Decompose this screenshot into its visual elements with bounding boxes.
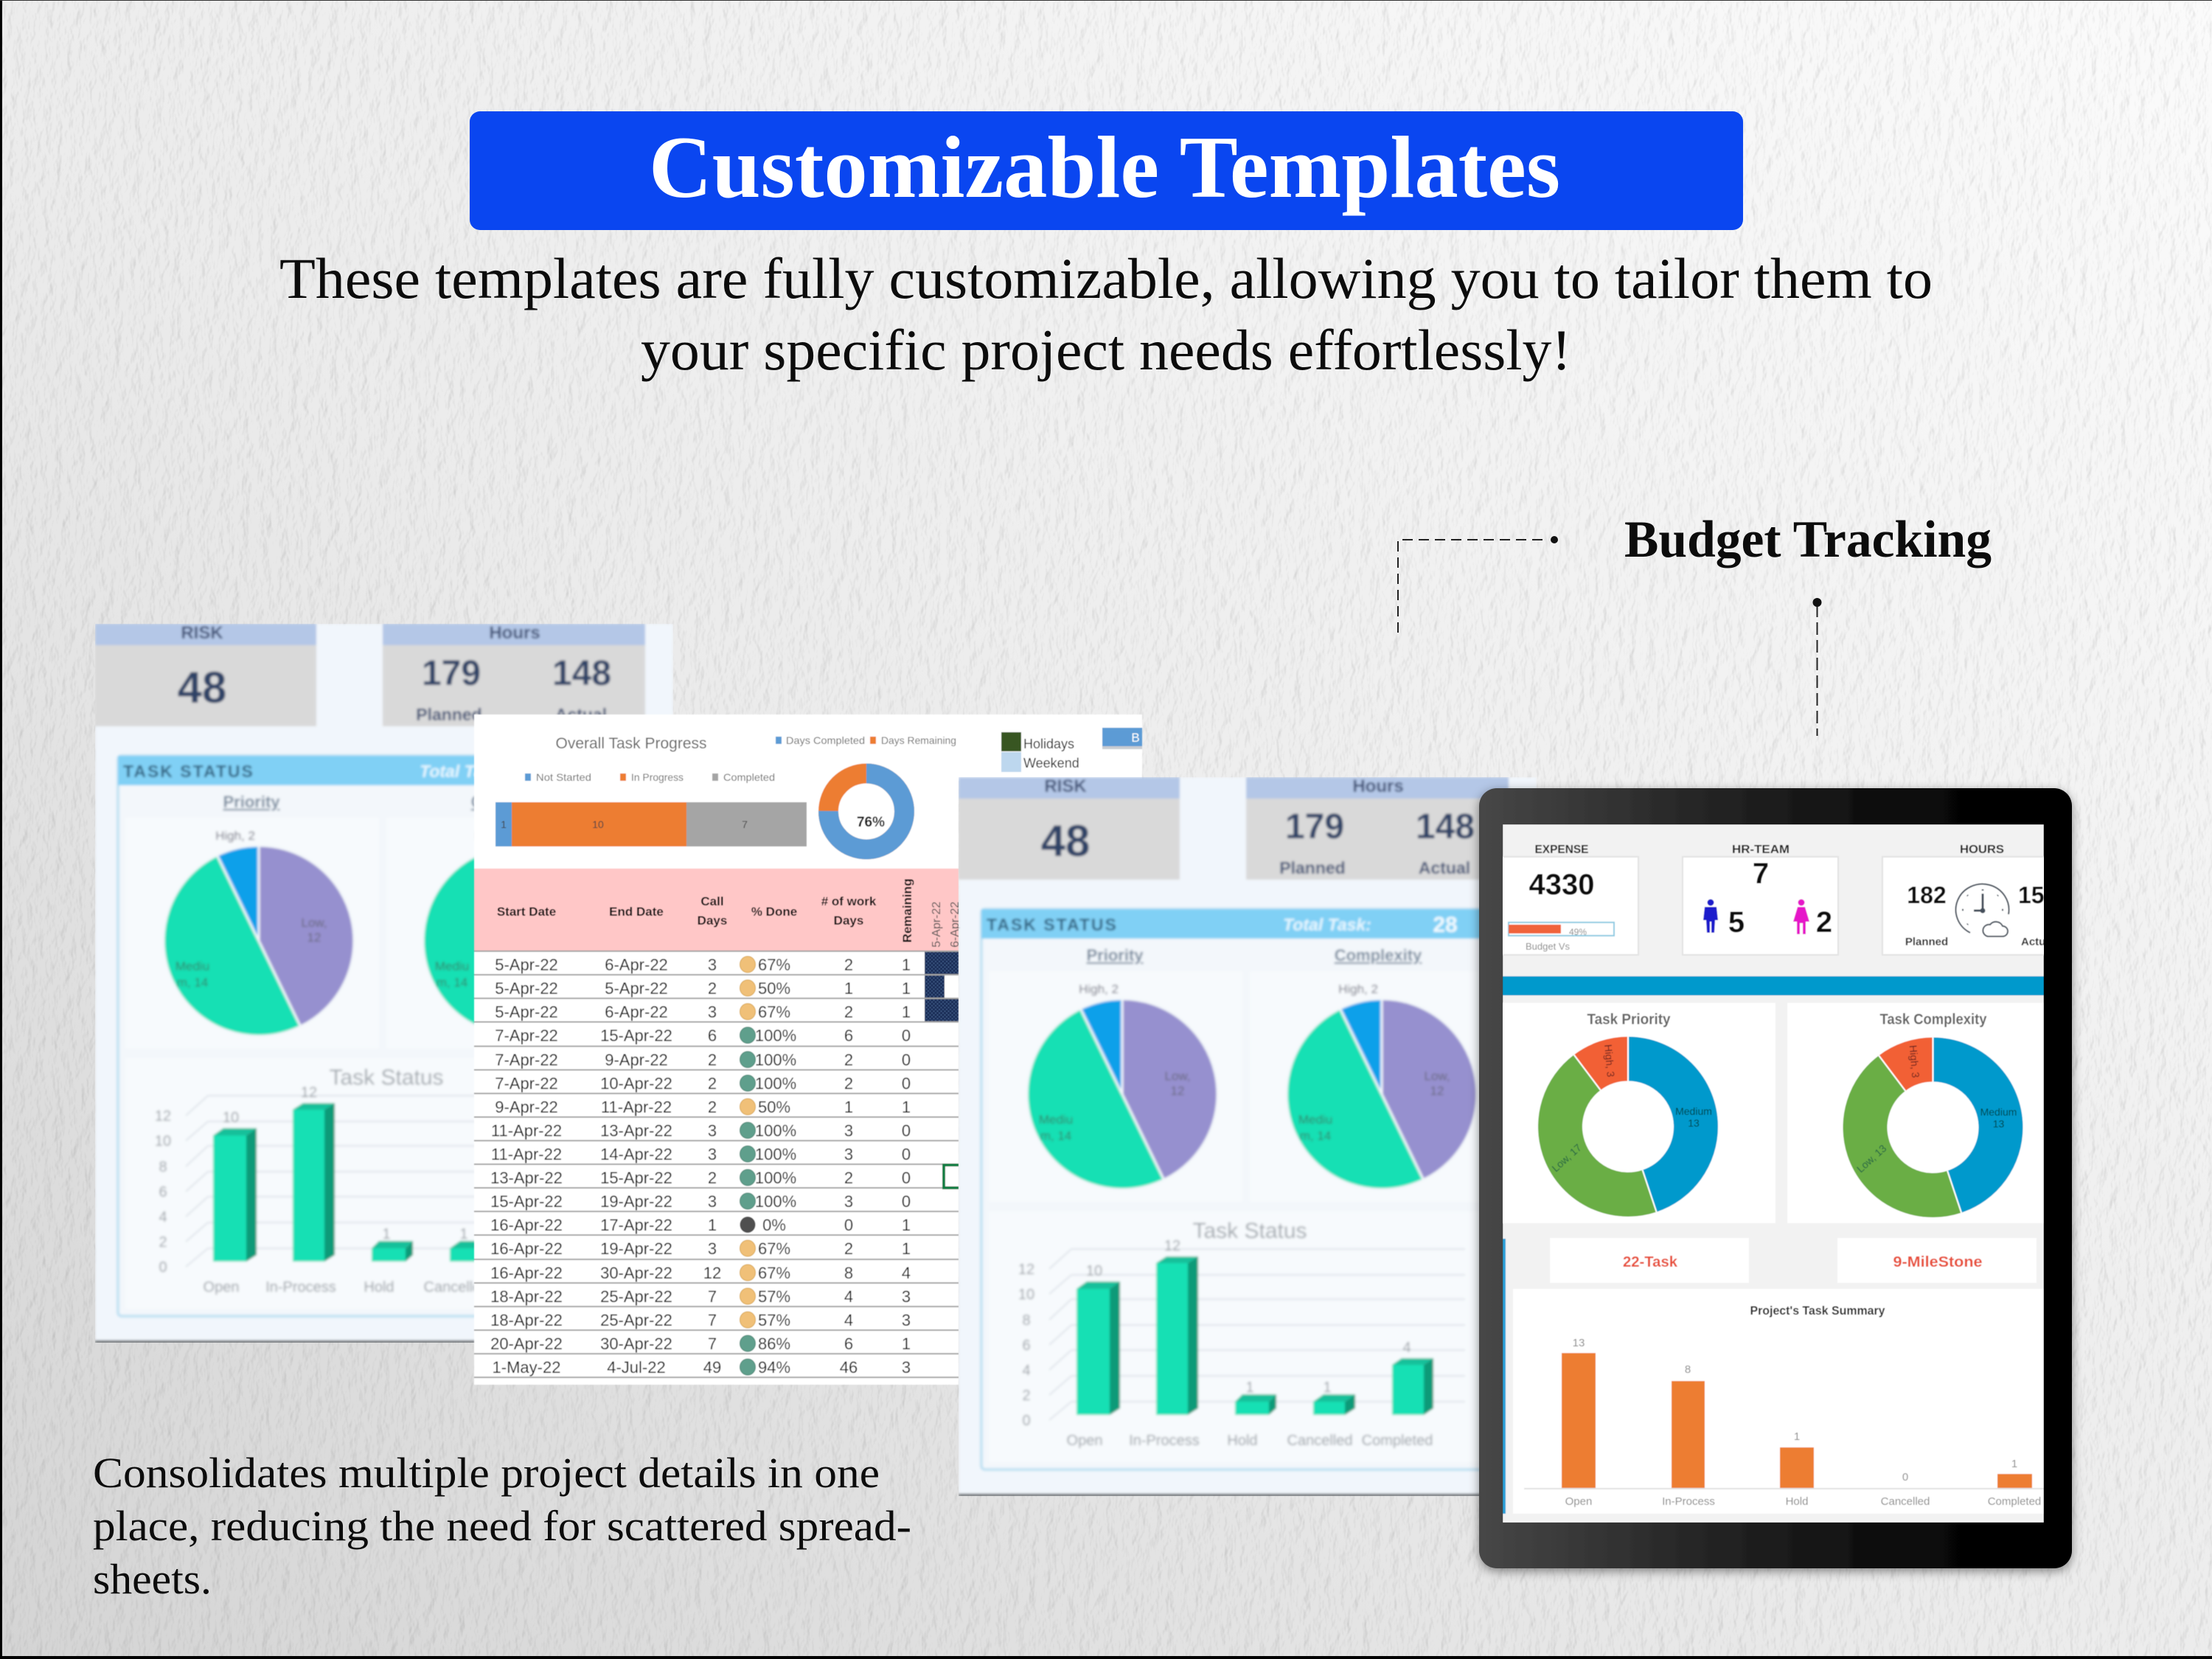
table rows: 0	[902, 1192, 911, 1211]
bar chart: project's task summary: 0	[1902, 1471, 1908, 1484]
table rows: 94%	[758, 1358, 790, 1377]
table rows: 2	[844, 1169, 853, 1187]
chart card: task complexity: Low, 13	[1854, 1142, 1889, 1175]
hr-team card	[1683, 844, 1838, 955]
table rows: 100%	[755, 1074, 796, 1093]
table rows: 5-Apr-22	[605, 979, 668, 998]
bar chart: task status: 0	[159, 1259, 167, 1276]
table rows: 2	[844, 1051, 853, 1069]
table rows: 2	[844, 956, 853, 974]
expense card	[1497, 844, 1638, 955]
bar chart: task status: Hold	[1227, 1433, 1258, 1449]
table rows: 67%	[758, 1264, 790, 1282]
chart card: task priority: Low, 17	[1549, 1141, 1584, 1174]
chart title: Overall Task Progress	[555, 735, 707, 752]
gantt cells	[925, 952, 959, 1021]
table rows: 25-Apr-22	[600, 1287, 672, 1306]
pie chart: priority: Low,	[302, 916, 327, 930]
bar chart: task status: 4	[1022, 1363, 1031, 1379]
table rows: 16-Apr-22	[490, 1239, 563, 1258]
bar chart: task status: 1	[1245, 1380, 1254, 1396]
hours card: Actual	[555, 705, 607, 724]
bar chart: task status: Completed	[498, 1279, 569, 1295]
panel: back dashboard left	[95, 623, 673, 1343]
table rows: 1	[902, 956, 911, 974]
table rows: 4-Jul-22	[607, 1358, 666, 1377]
bar chart: task status: 0	[1022, 1413, 1031, 1429]
text block: consolidates project details: place, reducing the need for scattered spread-	[93, 1502, 911, 1550]
pie chart: complexity	[1287, 982, 1477, 1189]
table rows: 67%	[758, 1003, 790, 1021]
expense card: EXPENSE	[1535, 844, 1589, 856]
table rows: 11-Apr-22	[601, 1098, 672, 1116]
table rows: 2	[844, 1074, 853, 1093]
task status bar: Total Task:	[420, 762, 508, 781]
pie chart: priority	[1027, 982, 1217, 1189]
table rows: 3	[708, 956, 717, 974]
hours card: HOURS	[1960, 844, 2004, 856]
table rows: 9-Apr-22	[495, 1098, 558, 1116]
task status bar: TASK STATUS	[123, 762, 254, 781]
expense card: 49%	[1569, 927, 1587, 937]
button	[1102, 728, 1142, 749]
bar chart: project's task summary: In-Process	[1662, 1495, 1715, 1508]
table rows: 12	[703, 1264, 721, 1282]
hours card: 182	[1907, 882, 1947, 908]
hours card: 148	[1416, 807, 1475, 846]
bar chart: project's task summary: Project's Task Summary	[1750, 1304, 1885, 1318]
table rows: 7-Apr-22	[495, 1051, 558, 1069]
bar chart: project's task summary: Cancelled	[1881, 1495, 1930, 1508]
expense card: Budget Vs	[1526, 941, 1570, 952]
table rows: 5-Apr-22	[495, 956, 558, 974]
hours card	[383, 623, 645, 726]
chart card: task priority	[1497, 1003, 1775, 1223]
table rows: 18-Apr-22	[490, 1311, 563, 1329]
bar chart: task status: 12	[1164, 1238, 1180, 1254]
bar chart: task status: Hold	[364, 1279, 394, 1295]
table rows: 3	[844, 1145, 853, 1164]
text block: consolidates project details	[93, 1449, 911, 1603]
hours card: Actual	[2021, 936, 2055, 948]
hours card: Planned	[1905, 936, 1948, 948]
chart card: task priority: High, 3	[1602, 1044, 1617, 1078]
table rows: 0	[844, 1216, 853, 1234]
table rows: 2	[708, 1051, 717, 1069]
button: B	[1131, 731, 1140, 745]
risk card: RISK	[181, 623, 223, 643]
panel: back dashboard right	[959, 776, 1537, 1496]
stacked bar	[495, 802, 807, 846]
legend: holidays and weekend: Weekend	[1023, 756, 1079, 771]
hours card: 15	[2018, 882, 2045, 908]
table rows: 3	[708, 1145, 717, 1164]
bar chart: task status: Open	[1067, 1433, 1102, 1449]
pie chart: complexity: Low,	[561, 916, 586, 930]
table header: % Done	[751, 905, 797, 919]
task status bar: TASK STATUS	[987, 915, 1118, 934]
table rows: 7	[708, 1335, 717, 1353]
table rows: 0%	[762, 1216, 786, 1234]
stacked bar: 7	[742, 818, 748, 830]
table header: End Date	[609, 905, 664, 919]
hr-team card: HR-TEAM	[1732, 844, 1790, 856]
blue band	[1503, 976, 2044, 995]
chart card: task complexity: 13	[1993, 1118, 2004, 1130]
table rows: 6-Apr-22	[605, 956, 668, 974]
pie chart: priority: Low,	[1165, 1069, 1190, 1083]
table header: Remaining	[900, 879, 914, 942]
subtitle text: your specific project needs effortlessly!	[641, 318, 1571, 382]
bar chart: project's task summary: 1	[2011, 1458, 2017, 1470]
table rows: 3	[902, 1287, 911, 1306]
bar chart: task status: Cancelled	[1287, 1433, 1352, 1449]
legend: days: Days Remaining	[881, 734, 956, 746]
table rows: 6	[844, 1335, 853, 1353]
donut chart: 76%: 76%	[857, 815, 885, 830]
bar chart: task status: 12	[155, 1108, 171, 1124]
table rows: 17-Apr-22	[600, 1216, 672, 1234]
hours card: 148	[552, 654, 611, 693]
bar chart: task status: In-Process	[1129, 1433, 1200, 1449]
hours card	[1246, 776, 1509, 880]
table rows: 1	[708, 1216, 717, 1234]
hours card	[1882, 844, 2055, 955]
panel: back dashboard left: Complexity	[471, 793, 559, 811]
pie chart: priority: Mediu	[175, 959, 209, 973]
tablet mockup	[1479, 788, 2072, 1568]
stacked bar: 1	[501, 818, 507, 830]
table rows: 1	[902, 1239, 911, 1258]
bar chart: task status: 2	[159, 1234, 167, 1251]
pie chart: complexity	[422, 856, 475, 1026]
bar chart: task status: In-Process	[265, 1279, 336, 1295]
table rows: 1	[844, 979, 853, 998]
stat card: 22-task	[1550, 1238, 1749, 1283]
table header: 6-Apr-22	[949, 902, 961, 947]
panel: back dashboard left: Priority	[223, 793, 280, 811]
legend: status: Not Started	[536, 771, 591, 783]
bar chart: task status: 10	[1018, 1287, 1034, 1303]
table rows: 30-Apr-22	[600, 1335, 672, 1353]
table rows: 16-Apr-22	[490, 1216, 563, 1234]
pie chart: priority: Mediu	[1039, 1113, 1073, 1127]
table rows: 7	[708, 1287, 717, 1306]
table rows: 50%	[758, 979, 790, 998]
table rows: 57%	[758, 1311, 790, 1329]
bar chart: task status: 12	[1018, 1262, 1034, 1278]
pie chart: priority: m, 14	[1040, 1129, 1071, 1143]
table rows: 57%	[758, 1287, 790, 1306]
pie chart: complexity: High, 2	[475, 829, 515, 843]
task status bar: 28	[569, 759, 594, 784]
table rows: 15-Apr-22	[600, 1169, 672, 1187]
table rows: 25-Apr-22	[600, 1311, 672, 1329]
table header: Call	[700, 894, 724, 908]
table rows: 2	[708, 979, 717, 998]
table rows: 86%	[758, 1335, 790, 1353]
table rows: 1	[902, 1003, 911, 1021]
bar chart: project's task summary: Hold	[1786, 1495, 1808, 1508]
table rows: 0	[902, 1169, 911, 1187]
bar chart: task status: 4	[539, 1186, 548, 1203]
chart card: task complexity: Task Complexity	[1880, 1012, 1987, 1028]
table header: Days	[698, 914, 727, 928]
table rows: 2	[844, 1003, 853, 1021]
table rows: 2	[708, 1169, 717, 1187]
pie chart: complexity: Low,	[1425, 1069, 1450, 1083]
table rows: 6	[708, 1026, 717, 1045]
table rows: 3	[708, 1192, 717, 1211]
bar chart: project's task summary: Completed	[1988, 1495, 2041, 1508]
table rows: 50%	[758, 1098, 790, 1116]
table rows: 3	[708, 1003, 717, 1021]
table rows: 3	[902, 1358, 911, 1377]
pie chart: priority: m, 14	[177, 975, 208, 990]
chart card: task priority: Medium	[1675, 1105, 1712, 1117]
chart card: task priority: Task Priority	[1587, 1012, 1671, 1028]
pie chart: priority: 12	[1171, 1084, 1184, 1098]
bar chart: project's task summary: 8	[1685, 1363, 1691, 1376]
table rows: 11-Apr-22	[491, 1121, 562, 1140]
table rows: 13-Apr-22	[600, 1121, 672, 1140]
hr-team card: 5	[1728, 906, 1745, 939]
table rows: 19-Apr-22	[600, 1192, 672, 1211]
table rows: 67%	[758, 956, 790, 974]
table header	[474, 869, 961, 951]
table rows	[490, 956, 911, 1377]
table rows: 100%	[755, 1026, 796, 1045]
task status bar	[116, 755, 475, 787]
pie chart: complexity: Mediu	[435, 959, 469, 973]
table rows: 7	[708, 1311, 717, 1329]
table rows: 10-Apr-22	[600, 1074, 672, 1093]
bar chart: task status: 10	[155, 1133, 171, 1150]
hours card: 179	[1285, 807, 1344, 846]
stat card: 9-milestone: 9-MileStone	[1893, 1254, 1982, 1270]
panel: back dashboard right: Priority	[1086, 946, 1144, 964]
bar chart: task status: 12	[301, 1085, 317, 1101]
hours card: Actual	[1419, 858, 1470, 877]
stat card: 22-task: 22-Task	[1623, 1254, 1678, 1270]
table rows: 100%	[755, 1121, 796, 1140]
chart card: task complexity: High, 3	[1907, 1045, 1921, 1079]
bar chart: task status: 8	[159, 1159, 167, 1175]
legend: status: Completed	[723, 771, 775, 783]
icon: clock with cloud	[1956, 884, 2009, 936]
table rows: 100%	[755, 1145, 796, 1164]
table rows: 18-Apr-22	[490, 1287, 563, 1306]
task status bar	[981, 909, 1520, 939]
task status bar: Total Task:	[1283, 915, 1371, 934]
bar chart: task status: 8	[1022, 1312, 1031, 1329]
pie chart: priority: 12	[307, 931, 321, 945]
hr-team card: 7	[1753, 858, 1769, 890]
table rows: 0	[902, 1026, 911, 1045]
pie chart: priority: High, 2	[215, 829, 255, 843]
pie chart: complexity: 12	[1430, 1084, 1444, 1098]
table rows: 1	[902, 1098, 911, 1116]
legend: days	[776, 734, 956, 746]
table rows: 1	[902, 1216, 911, 1234]
bar chart: task status: 1	[1323, 1380, 1332, 1396]
table rows: 0	[902, 1051, 911, 1069]
table rows: 6	[844, 1026, 853, 1045]
table rows: 11-Apr-22	[491, 1145, 562, 1164]
table rows: 2	[708, 1074, 717, 1093]
risk card	[95, 623, 316, 726]
table rows: 100%	[755, 1169, 796, 1187]
table rows: 16-Apr-22	[490, 1264, 563, 1282]
chart card: task priority: 13	[1688, 1117, 1700, 1129]
table rows: 19-Apr-22	[600, 1239, 672, 1258]
table rows: 30-Apr-22	[600, 1264, 672, 1282]
table rows: 3	[844, 1192, 853, 1211]
bar chart: project's task summary: 1	[1794, 1430, 1800, 1443]
donut chart: 76%	[829, 773, 904, 849]
legend: holidays and weekend: Holidays	[1023, 737, 1074, 751]
table rows: 13-Apr-22	[490, 1169, 563, 1187]
risk card	[959, 776, 1180, 880]
title banner	[470, 111, 1743, 230]
bar chart: project's task summary: Open	[1565, 1495, 1592, 1508]
table rows: 3	[708, 1239, 717, 1258]
table rows: 4	[844, 1311, 853, 1329]
table rows: 3	[708, 1121, 717, 1140]
icon: man	[1703, 900, 1718, 933]
pie chart: complexity: m, 14	[1300, 1129, 1331, 1143]
bar chart: task status: 6	[159, 1184, 167, 1200]
bar chart: task status: 6	[1022, 1338, 1031, 1354]
hours card: Planned	[416, 705, 482, 724]
selected cell	[944, 1165, 959, 1188]
table rows: 7-Apr-22	[495, 1026, 558, 1045]
bar chart: task status: 4	[1402, 1340, 1411, 1356]
pie chart: priority: High, 2	[1079, 982, 1119, 996]
table rows: 100%	[755, 1192, 796, 1211]
subtitle text	[279, 246, 1933, 382]
table rows: 67%	[758, 1239, 790, 1258]
bar chart: task status	[156, 1068, 475, 1295]
pie chart: complexity: Mediu	[1298, 1113, 1332, 1127]
text block: consolidates project details: sheets.	[93, 1555, 212, 1603]
table rows: 6-Apr-22	[605, 1003, 668, 1021]
table rows: 1	[844, 1098, 853, 1116]
table rows: 100%	[755, 1051, 796, 1069]
pie chart: complexity: m, 14	[437, 975, 467, 990]
icon: woman	[1793, 900, 1809, 934]
table rows: 3	[902, 1311, 911, 1329]
table rows: 5-Apr-22	[495, 1003, 558, 1021]
connector arrow: budget tracking to tablet	[1812, 598, 1821, 736]
bar chart: task status: 10	[1086, 1263, 1102, 1279]
table rows: 7-Apr-22	[495, 1074, 558, 1093]
table rows: 15-Apr-22	[490, 1192, 563, 1211]
task status bar: 28	[1433, 913, 1458, 937]
bar chart: task status: 4	[159, 1209, 167, 1225]
bar chart: task status: Task Status	[1192, 1219, 1307, 1243]
table rows: 0	[902, 1121, 911, 1140]
bar chart: task status: Task Status	[329, 1065, 444, 1090]
pie chart: complexity: 12	[567, 931, 580, 945]
bar chart: task status	[989, 1211, 1512, 1462]
bar chart: task status: 1	[382, 1226, 391, 1242]
table rows: 0	[902, 1145, 911, 1164]
bar chart: task status: 10	[223, 1110, 239, 1126]
bar chart: task status: Completed	[1362, 1433, 1433, 1449]
table rows: 2	[708, 1098, 717, 1116]
table rows: 3	[844, 1121, 853, 1140]
table rows: 14-Apr-22	[600, 1145, 672, 1164]
stacked bar: 10	[592, 818, 604, 830]
table rows: 9-Apr-22	[605, 1051, 668, 1069]
table rows: 8	[844, 1264, 853, 1282]
heading: budget tracking: Budget Tracking	[1624, 511, 1992, 568]
risk card: 48	[1041, 816, 1090, 866]
table rows: 20-Apr-22	[490, 1335, 563, 1353]
connector arrow: budget tracking to dashboard	[1398, 536, 1558, 633]
bar chart: task status: Open	[204, 1279, 239, 1295]
hr-team card: 2	[1816, 906, 1832, 939]
subtitle text: These templates are fully customizable, allowing you to tailor them to	[279, 246, 1933, 310]
risk card: 48	[178, 663, 226, 712]
table rows: 1-May-22	[493, 1358, 560, 1377]
pie chart: priority	[164, 829, 354, 1036]
bar chart: task status: 1	[459, 1226, 468, 1242]
pie chart: complexity: High, 2	[1338, 982, 1378, 996]
table rows: 4	[902, 1264, 911, 1282]
panel: task progress table	[474, 714, 1142, 1385]
hours card: 179	[422, 654, 481, 693]
table rows: 4	[844, 1287, 853, 1306]
table header: 5-Apr-22	[931, 902, 943, 947]
tablet screen	[1497, 824, 2055, 1523]
legend: days: Days Completed	[786, 734, 865, 746]
table header: Days	[834, 914, 863, 928]
text block: consolidates project details: Consolidates multiple project details in one	[93, 1449, 880, 1497]
table rows: 5-Apr-22	[495, 979, 558, 998]
table rows: 1	[902, 979, 911, 998]
panel: back dashboard right: Complexity	[1335, 946, 1422, 964]
legend: status	[525, 771, 775, 783]
table rows: 49	[703, 1358, 721, 1377]
table rows: 0	[902, 1074, 911, 1093]
hours card: Hours	[1352, 776, 1404, 796]
table header: Start Date	[497, 905, 556, 919]
expense card: 4330	[1529, 869, 1594, 901]
hours card: Planned	[1279, 858, 1346, 877]
bar chart: project's task summary	[1513, 1289, 2044, 1514]
chart card: task complexity	[1787, 1003, 2044, 1223]
legend: holidays and weekend	[1001, 732, 1079, 772]
bar chart: task status: Cancelled	[424, 1279, 489, 1295]
hours card: Hours	[489, 623, 540, 643]
table rows: 15-Apr-22	[600, 1026, 672, 1045]
table header: # of work	[821, 894, 877, 908]
table rows: 2	[844, 1239, 853, 1258]
stat card: 9-milestone	[1837, 1238, 2037, 1283]
risk card: RISK	[1044, 776, 1087, 796]
table rows: 1	[902, 1335, 911, 1353]
legend: status: In Progress	[631, 771, 684, 783]
bar chart: task status: 2	[1022, 1388, 1031, 1404]
bar chart: project's task summary: 13	[1573, 1337, 1585, 1349]
chart card: task complexity: Medium	[1980, 1106, 2017, 1118]
title banner: Customizable Templates	[649, 118, 1560, 216]
table rows: 46	[840, 1358, 858, 1377]
